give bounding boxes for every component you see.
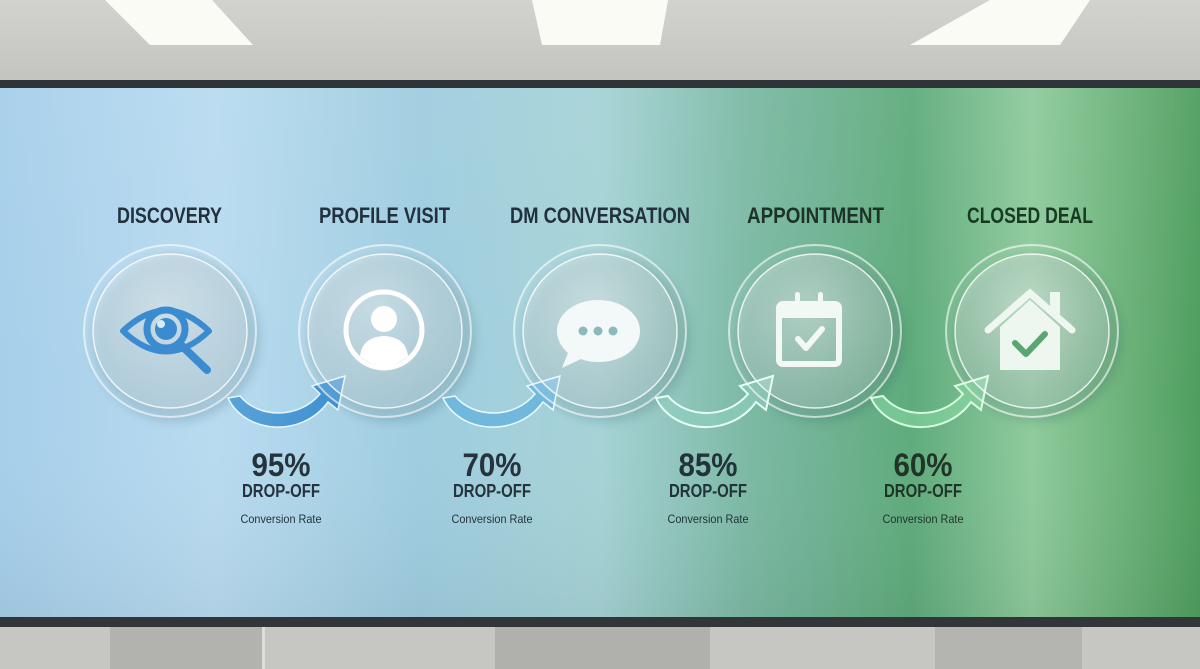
arrow 1 [228,376,345,427]
drop-off stat 1: DROP-OFF [242,481,320,501]
circle shadows [92,254,1122,422]
lower wall [0,625,1200,669]
screen [0,88,1200,617]
stage titles: APPOINTMENT [747,203,884,228]
stage titles: DM CONVERSATION [510,203,690,228]
screen frame [0,80,1200,89]
drop-off stat 4 [882,447,964,526]
drop-off stat 2: 70% [462,447,522,483]
arrow 3 [656,376,773,427]
drop-off stat 2 [452,447,533,526]
icon: house check [988,292,1072,370]
stage titles [117,203,1093,228]
drop-off stat 4: Conversion Rate [882,512,964,526]
drop-off stat 1: Conversion Rate [240,512,322,526]
drop-off stat 3: Conversion Rate [668,512,749,526]
drop-off stat 4: DROP-OFF [884,481,962,501]
drop-off stat 3: 85% [678,447,738,483]
step circles [84,245,1118,417]
arrow 4 [871,376,988,427]
drop-off stat 2: Conversion Rate [452,512,533,526]
arrow 2 [443,376,560,427]
stage titles: CLOSED DEAL [967,203,1093,228]
icon: eye with magnifier [123,310,209,370]
drop-off stat 3: DROP-OFF [669,481,747,501]
arrows [228,376,988,427]
icon: chat bubble [557,300,640,368]
drop-off stat 2: DROP-OFF [453,481,531,501]
drop-off stat 4: 60% [894,447,952,483]
icon: calendar check [779,292,839,364]
stage titles: DISCOVERY [117,203,222,228]
ceiling lights [105,0,1090,45]
ceiling [0,0,1200,82]
drop-off stat 3 [668,447,749,526]
drop-off stat 1: 95% [252,447,310,483]
icon: profile [346,292,422,368]
drop-off stat 1 [240,447,322,526]
stage titles: PROFILE VISIT [319,203,450,228]
